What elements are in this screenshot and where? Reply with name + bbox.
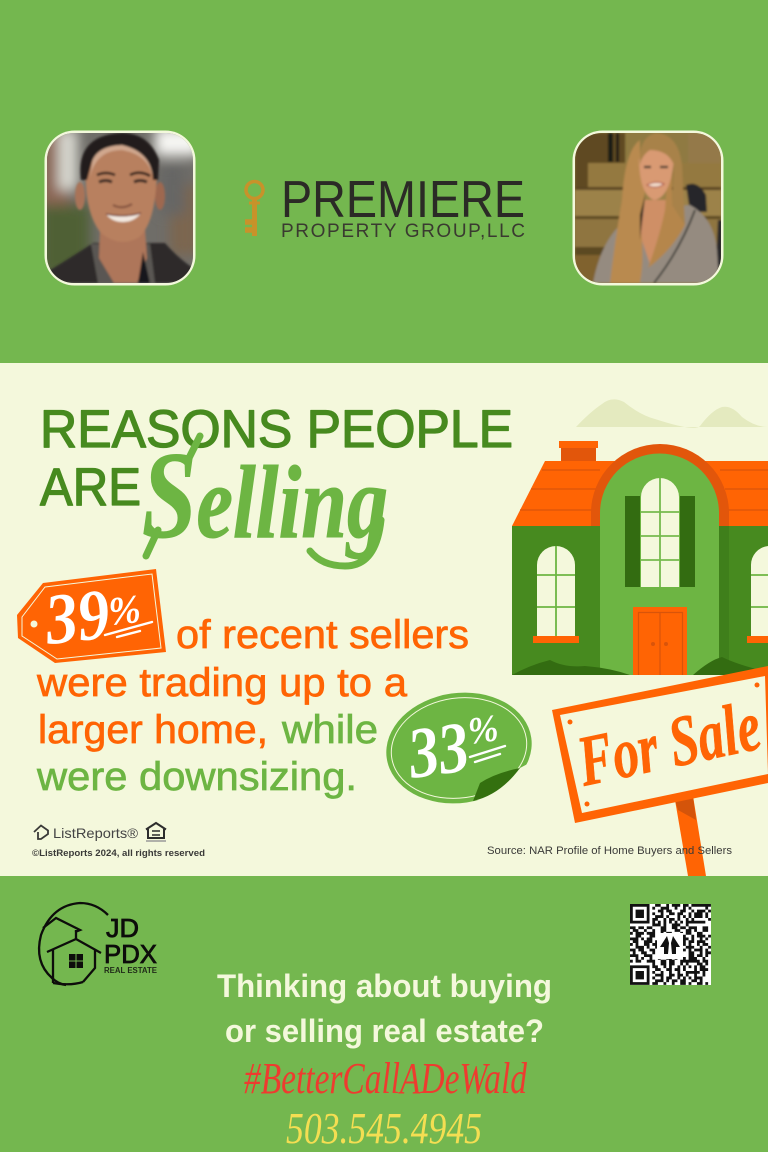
photo: woman portrait <box>572 130 724 286</box>
sign post <box>675 796 706 876</box>
listreports branding <box>32 823 205 859</box>
price tag: 39%: % <box>106 586 143 634</box>
phone number: 503.545.4945 <box>286 1104 482 1152</box>
central window <box>641 478 679 587</box>
name PDX: PDX <box>104 939 157 969</box>
chimney <box>559 441 598 461</box>
right window <box>747 546 768 643</box>
real estate: REAL ESTATE <box>104 966 158 975</box>
heading line 1: Thinking about buying <box>217 968 552 1004</box>
copyright: ©ListReports 2024, all rights reserved <box>32 848 205 859</box>
title: reasons people are <box>40 400 513 517</box>
statistic text: were trading up to a <box>36 661 408 705</box>
left window <box>533 546 579 643</box>
name JD: JD <box>106 913 139 943</box>
roof <box>512 461 768 526</box>
photo: man portrait <box>40 125 200 286</box>
icon: gold key <box>245 182 263 236</box>
walls <box>512 526 768 675</box>
tower <box>600 454 719 675</box>
property group wordmark: PROPERTY GROUP,LLC <box>281 221 525 242</box>
statistic text: larger home, <box>38 708 268 752</box>
arch outer <box>591 444 729 526</box>
title: reasons people are: REASONS PEOPLE <box>40 400 513 459</box>
sticker: 33% <box>379 683 545 813</box>
call to action <box>217 968 552 1152</box>
logo: JD PDX real estate <box>39 903 158 985</box>
statistic text: of recent sellers <box>176 613 469 657</box>
house illustration <box>512 441 768 675</box>
title: reasons people are: ARE <box>40 458 141 517</box>
QR code <box>630 904 711 985</box>
statistic text <box>36 613 469 799</box>
sign board <box>552 666 768 823</box>
sticker: 33%: 33 <box>402 706 474 794</box>
door <box>633 607 687 675</box>
logo: Premiere Property Group <box>245 171 525 242</box>
hashtag: #BetterCallADeWald <box>244 1054 528 1103</box>
shutters <box>625 496 695 587</box>
for sale sign <box>552 666 768 876</box>
icon: circle and house <box>39 903 108 985</box>
title: selling script: Selling <box>142 427 388 564</box>
QR center badge with arrows <box>657 933 683 959</box>
source note: Source: NAR Profile of Home Buyers and Sellers <box>487 845 733 857</box>
decorative hills <box>576 399 768 428</box>
sticker: 33%: % <box>465 707 501 753</box>
premiere wordmark: PREMIERE <box>281 171 525 229</box>
icon: listreports house <box>34 826 48 839</box>
listreports name: ListReports® <box>53 825 139 841</box>
statistic text: were downsizing. <box>36 755 357 799</box>
statistic text: while <box>281 708 378 752</box>
icon: equal housing <box>146 823 166 841</box>
heading line 2: or selling real estate? <box>225 1013 544 1049</box>
price tag: 39%: 39 <box>40 574 113 660</box>
bushes <box>512 657 768 675</box>
panel: cream main band <box>0 363 768 876</box>
price tag: 39% <box>17 569 166 663</box>
